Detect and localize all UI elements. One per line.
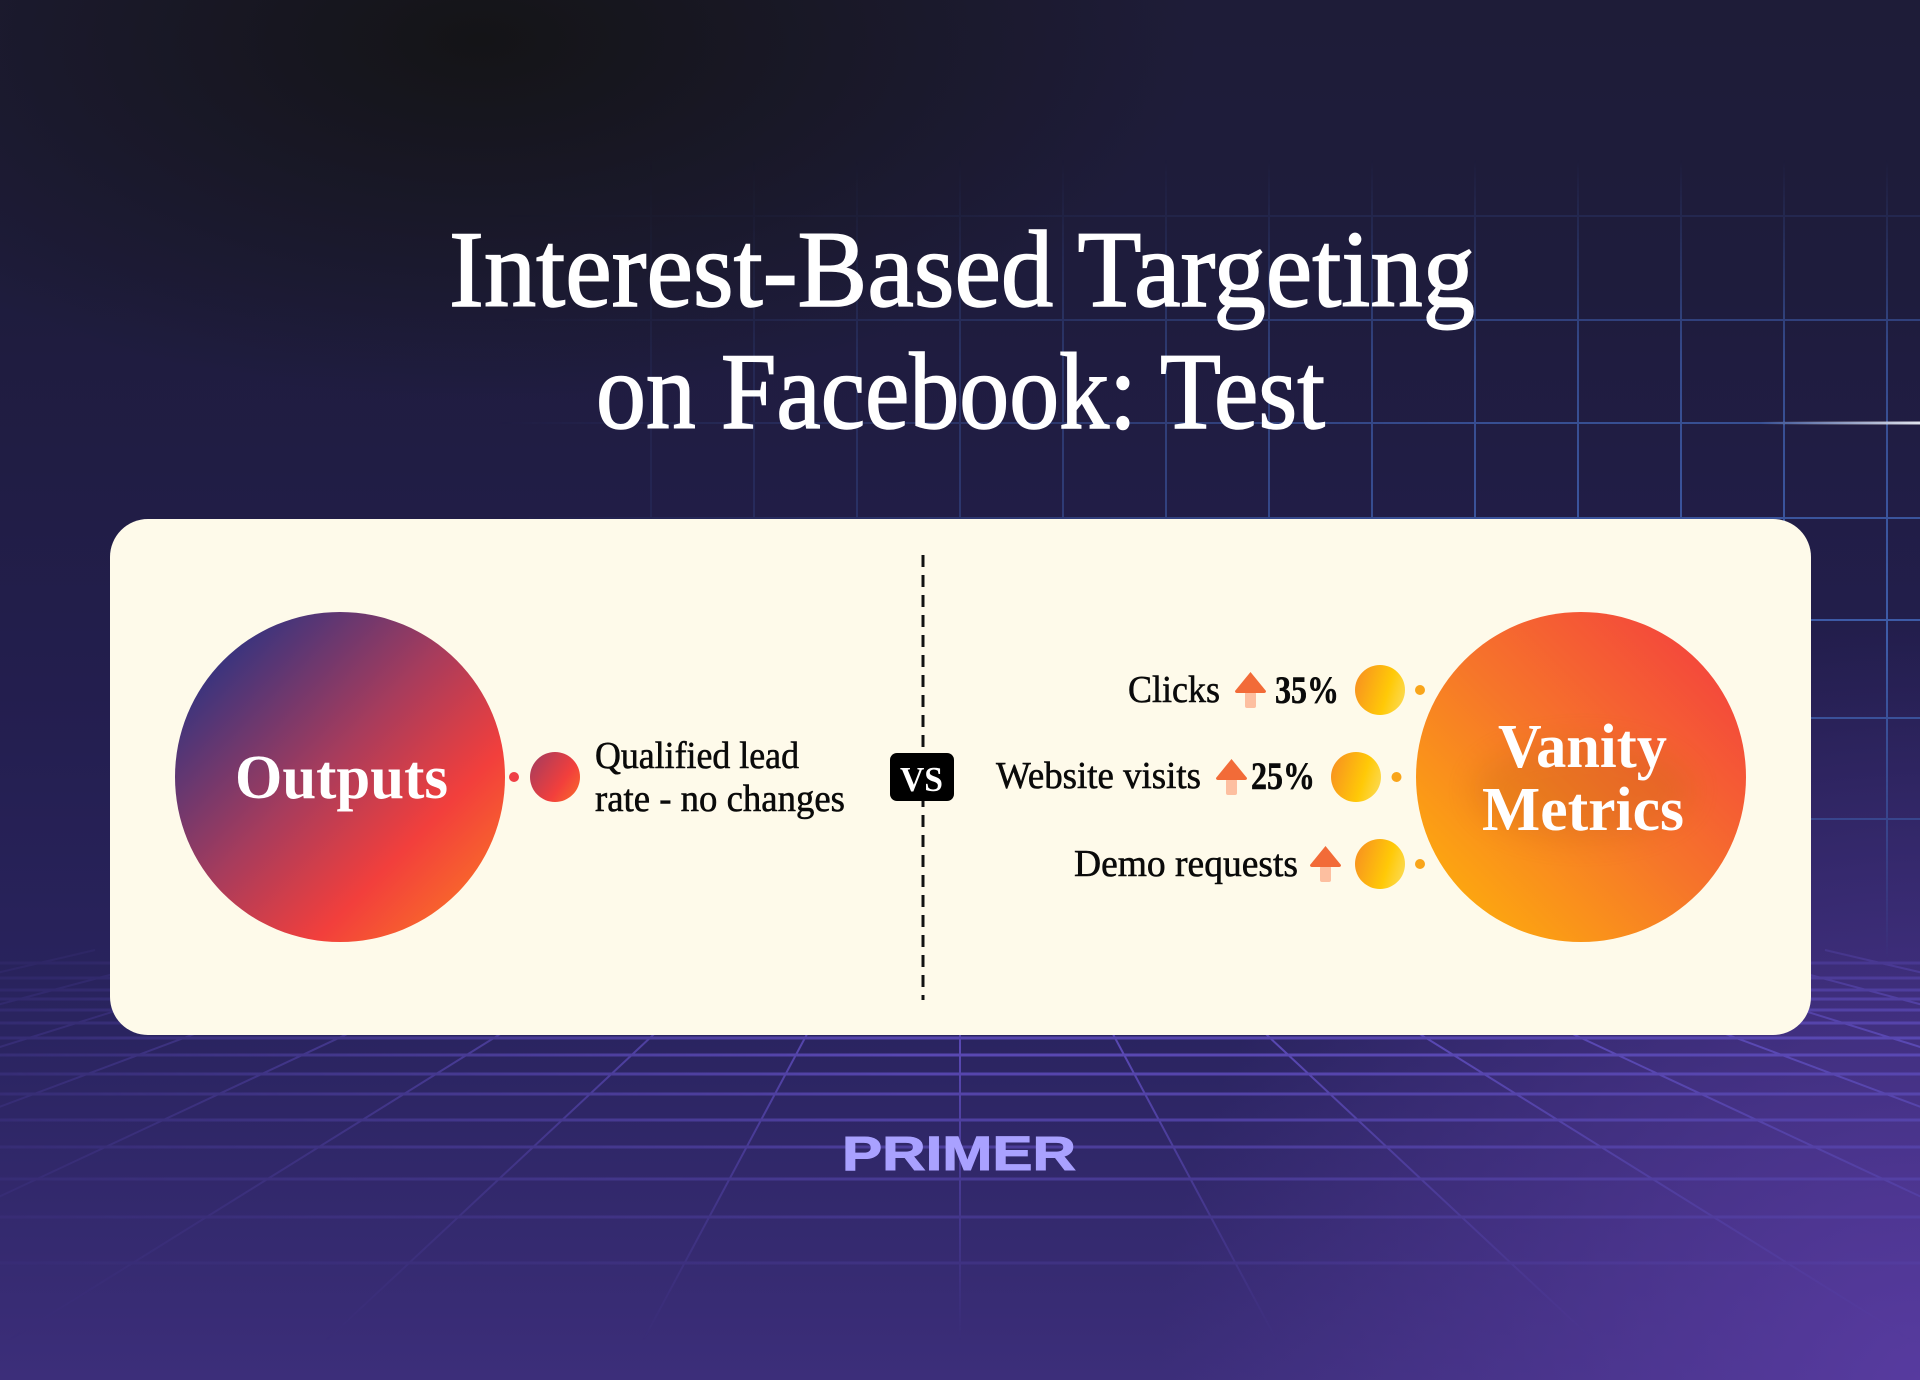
- row: clicks: [1128, 665, 1425, 715]
- badge: vs: [890, 753, 954, 801]
- row: demo requests: Demo requests: [1074, 843, 1298, 885]
- background floor grid: [0, 949, 1920, 1300]
- icon: up arrow: [1216, 759, 1247, 795]
- circle: vanity metrics: Vanity: [1498, 713, 1667, 781]
- divider: dashed line: [922, 555, 924, 1000]
- panel: comparison card: [110, 519, 1811, 1035]
- row: website visits: Website visits: [996, 755, 1201, 797]
- light streak: [1760, 422, 1920, 424]
- row: demo requests: [1074, 839, 1425, 889]
- logo: primer: PRIMER: [842, 1128, 1076, 1181]
- node: outputs: [530, 752, 580, 802]
- circle: vanity metrics: Metrics: [1482, 776, 1684, 844]
- text: qualified lead: [595, 735, 845, 820]
- row: website visits: [996, 752, 1402, 802]
- badge: vs: VS: [900, 760, 943, 799]
- text: qualified lead: rate - no changes: [595, 778, 845, 820]
- row: clicks: Clicks: [1128, 669, 1220, 711]
- circle: vanity metrics: [1416, 612, 1746, 942]
- connector dot: outputs: [509, 772, 519, 782]
- title: Interest-Based Targeting: [449, 209, 1475, 330]
- circle: outputs: Outputs: [235, 744, 448, 812]
- icon: up arrow: [1310, 846, 1341, 882]
- row: clicks: 35%: [1275, 669, 1339, 712]
- row: website visits: 25%: [1251, 755, 1315, 798]
- background wall grid: [602, 184, 1920, 922]
- circle: outputs: [175, 612, 505, 942]
- icon: up arrow: [1235, 672, 1266, 708]
- title: on Facebook: Test: [596, 331, 1325, 452]
- title: [449, 209, 1475, 452]
- text: qualified lead: Qualified lead: [595, 735, 799, 777]
